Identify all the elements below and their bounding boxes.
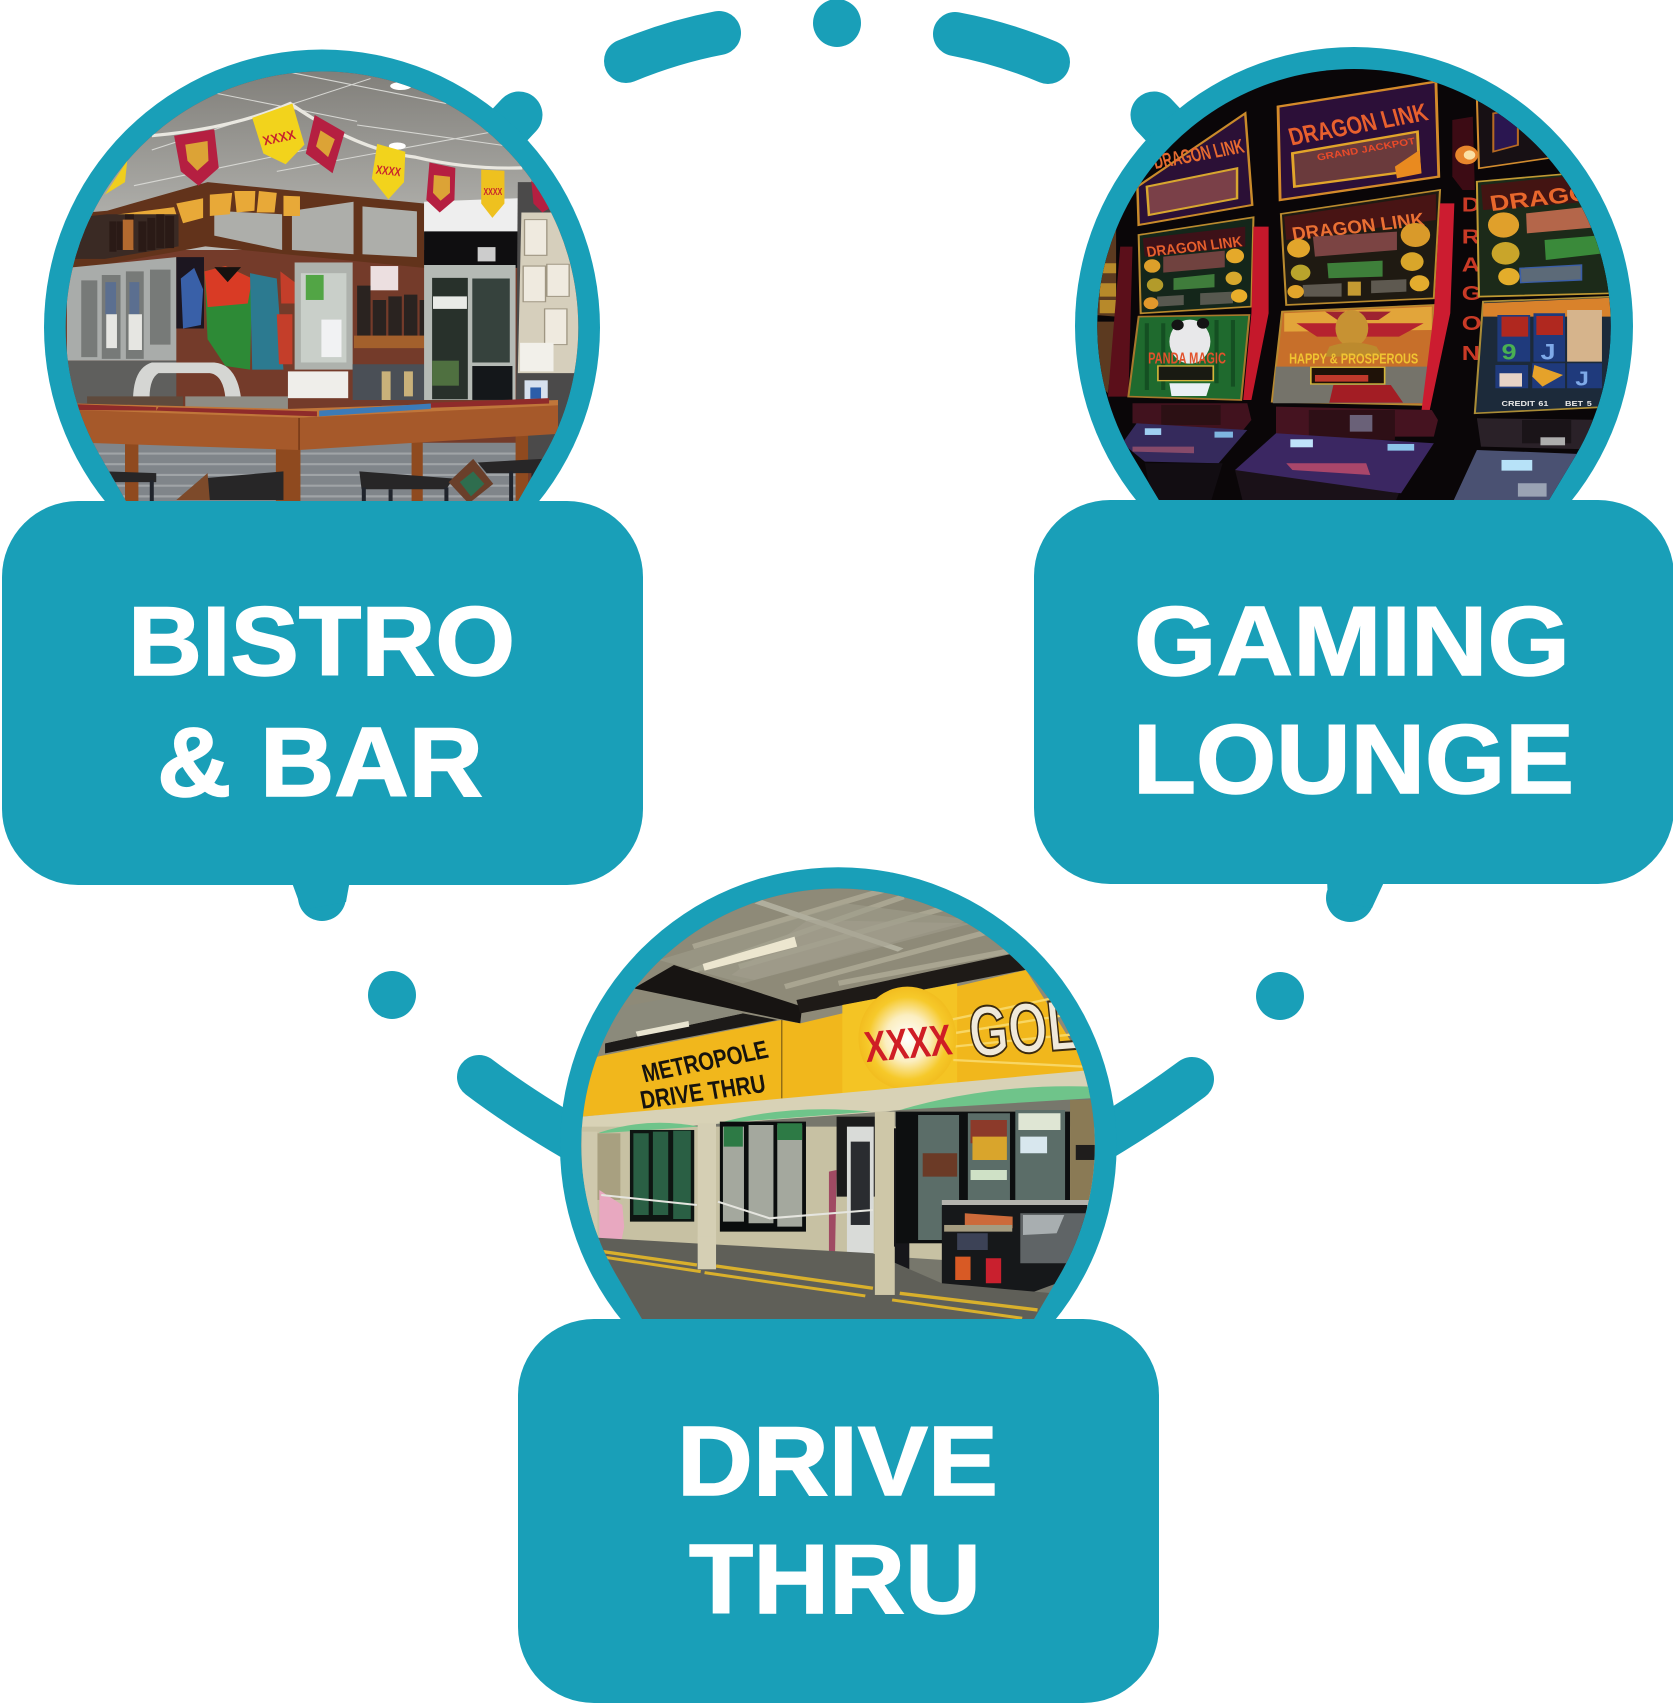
- panel: gaming lounge: [1034, 47, 1673, 922]
- label: thru: THRU: [689, 1524, 981, 1634]
- photo: gaming machines: CREDIT: [1501, 400, 1535, 408]
- photo: gaming machines: R: [1462, 225, 1480, 248]
- photo: gaming machines: [1097, 69, 1611, 500]
- dot: top centre: [813, 0, 861, 47]
- dashed arc: top right dash: [955, 34, 1048, 62]
- photo: gaming machines: DRAGON LINK: [1291, 209, 1426, 245]
- photo: gaming machines: 61: [1538, 400, 1549, 408]
- label: lounge: LOUNGE: [1133, 704, 1574, 814]
- photo: gaming machines: G: [1462, 281, 1481, 304]
- photo: gaming machines: J: [1540, 341, 1556, 365]
- photo: drive thru storefront: GOL: [965, 985, 1082, 1073]
- photo: bar interior: XXXX: [483, 187, 502, 198]
- speech box: bistro and bar: [2, 501, 643, 921]
- speech box: drive thru: [518, 1319, 1159, 1703]
- label: and bar: & BAR: [157, 707, 483, 817]
- photo: gaming machines: PANDA MAGIC: [1148, 349, 1226, 367]
- photo: bar interior: XXXX: [261, 128, 298, 149]
- photo: drive thru storefront: XXXX: [862, 1015, 954, 1071]
- ring: drive thru photo frame: [560, 867, 1117, 1424]
- photo: gaming machines: GRAND JACKPOT: [1316, 137, 1417, 163]
- photo: gaming machines: D: [1462, 193, 1480, 216]
- photo: gaming machines: 5: [1587, 400, 1592, 408]
- photo: bar interior: [66, 72, 578, 501]
- photo: gaming machines: J: [1575, 367, 1589, 390]
- photo: gaming machines: O: [1462, 311, 1481, 334]
- label: bistro: BISTRO: [128, 586, 515, 696]
- photo: gaming machines: BET: [1565, 400, 1583, 408]
- photo: gaming machines: DRAGON: [1488, 179, 1611, 216]
- photo: drive thru storefront: METROPOLE: [639, 1035, 771, 1088]
- label: drive: DRIVE: [677, 1406, 998, 1516]
- photo: gaming machines: DRAGON LINK: [1145, 234, 1244, 261]
- photo: gaming machines: HAPPY & PROSPEROUS: [1289, 351, 1418, 367]
- photo: gaming machines: DRAGON LINK: [1150, 135, 1247, 173]
- photo: drive thru storefront: DRIVE THRU: [638, 1069, 768, 1114]
- label: gaming: GAMING: [1134, 586, 1570, 696]
- ring: gaming photo frame: [1075, 47, 1633, 605]
- ring: bistro photo frame: [44, 50, 600, 606]
- nub: bistro ring connector: [503, 115, 519, 132]
- photo: gaming machines: 9: [1501, 341, 1517, 365]
- panel: bistro and bar: [2, 50, 643, 921]
- dashed arc: top left dash: [626, 33, 719, 61]
- nub: gaming ring connector: [1154, 115, 1170, 132]
- dashed arc: lower right dash: [1100, 1079, 1192, 1140]
- dot: lower left: [368, 971, 416, 1019]
- photo: gaming machines: DRAGON LINK: [1285, 98, 1431, 151]
- speech box: gaming lounge: [1034, 500, 1673, 922]
- photo: gaming machines: N: [1462, 341, 1480, 364]
- photo: bar interior: XXXX: [375, 163, 403, 179]
- photo: drive thru storefront: [578, 883, 1114, 1323]
- dot: lower right: [1256, 972, 1304, 1020]
- dashed arc: lower left dash: [479, 1077, 575, 1140]
- panel: drive thru: [518, 867, 1159, 1703]
- photo: gaming machines: A: [1462, 253, 1480, 276]
